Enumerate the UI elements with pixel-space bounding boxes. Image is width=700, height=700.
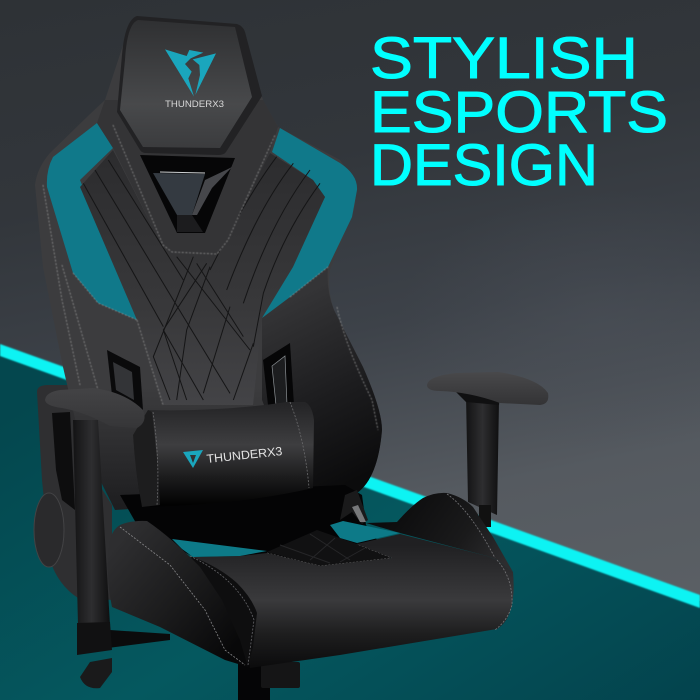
gaming chair xyxy=(34,16,548,700)
chair left side frame and recline knob xyxy=(34,385,112,600)
lumbar pillow xyxy=(133,402,314,507)
stitching on backrest xyxy=(43,125,378,430)
title: stylish esports design: ESPORTS xyxy=(370,80,668,145)
teal seat inset right xyxy=(330,521,400,543)
seat left bolster with stitching xyxy=(108,521,254,667)
V-shaped collar below headrest xyxy=(97,100,278,255)
teal seat inset left xyxy=(172,539,267,557)
gas lift cylinder xyxy=(238,660,300,700)
right armrest xyxy=(427,372,548,527)
seat right edge stitching xyxy=(447,494,512,630)
headrest brand text: THUNDERX3 xyxy=(165,99,224,110)
centre quilted panel with diamond stitching xyxy=(80,150,325,405)
black shadow area between lumbar and seat xyxy=(120,485,392,570)
seat right bolster xyxy=(366,493,513,572)
right side bolster of backrest xyxy=(262,267,382,495)
left armrest with post and bracket xyxy=(45,388,170,688)
right teal mesh panel xyxy=(262,128,357,318)
icon: lumbar logo xyxy=(183,450,203,468)
backrest shell xyxy=(35,30,382,510)
seat cushion xyxy=(193,534,514,668)
title: stylish esports design: STYLISH xyxy=(370,26,638,91)
title: stylish esports design: DESIGN xyxy=(370,133,598,198)
icon: headrest logo xyxy=(165,49,216,97)
lumbar brand text: THUNDERX3 xyxy=(206,444,283,466)
teal floor xyxy=(0,350,700,700)
title: stylish esports design xyxy=(370,26,668,198)
left teal mesh panel xyxy=(47,123,137,320)
headrest pad xyxy=(117,16,262,155)
neon cyan diagonal line xyxy=(0,344,700,608)
seat left inner bolster xyxy=(190,556,257,667)
headrest opening: black frame and see-through hole xyxy=(140,155,235,233)
side slots of backrest xyxy=(107,343,294,410)
seat centre stitched panel xyxy=(267,530,392,566)
seat hardware on right xyxy=(340,490,368,524)
